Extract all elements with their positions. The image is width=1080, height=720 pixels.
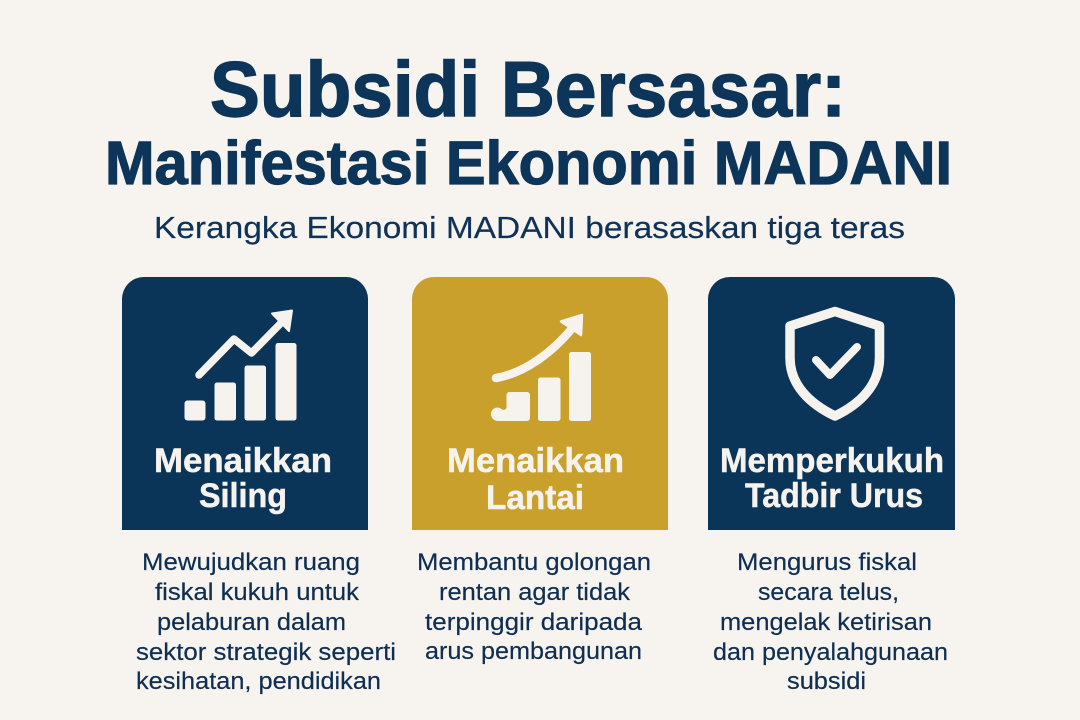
text block: Menaikkan Siling description: sektor strategik seperti — [136, 639, 396, 666]
text block: Menaikkan Lantai description: rentan agar tidak — [439, 579, 631, 606]
card background navy — [122, 277, 368, 530]
text block: Menaikkan Lantai description: arus pembangunan — [425, 638, 642, 665]
text block: Menaikkan Lantai description — [417, 549, 651, 665]
card background navy — [708, 277, 955, 530]
text block: Memperkukuh Tadbir Urus description: dan penyalahgunaan — [713, 639, 948, 666]
card heading — [447, 442, 624, 517]
text block: Memperkukuh Tadbir Urus description: mengelak ketirisan — [720, 609, 932, 636]
icon: rising bars with curved arrow — [491, 315, 591, 421]
icon: rising bar chart with arrow — [184, 310, 296, 420]
text block: Memperkukuh Tadbir Urus description: secara telus, — [758, 579, 899, 606]
panel: Menaikkan Siling — [122, 277, 368, 530]
card heading: Menaikkan — [447, 442, 624, 480]
icon: shield with check mark — [790, 312, 880, 416]
text block: Menaikkan Siling description: kesihatan, pendidikan — [136, 668, 381, 695]
text block: Menaikkan Lantai description: terpinggir daripada — [425, 609, 643, 636]
text block: Menaikkan Siling description: fiskal kukuh untuk — [155, 579, 360, 606]
card heading: Siling — [199, 477, 287, 515]
card heading: Menaikkan — [154, 442, 332, 480]
text block: Memperkukuh Tadbir Urus description — [713, 549, 948, 695]
card heading: Memperkukuh — [720, 442, 944, 480]
panel: Menaikkan Lantai — [412, 277, 668, 530]
title line 2: Manifestasi Ekonomi MADANI — [105, 129, 952, 197]
text block: Menaikkan Siling description: pelaburan dalam — [157, 609, 346, 636]
card heading — [720, 442, 944, 515]
panel: Memperkukuh Tadbir Urus — [708, 277, 955, 530]
text block: Menaikkan Siling description — [136, 549, 396, 695]
subtitle: Kerangka Ekonomi MADANI berasaskan tiga teras — [154, 210, 905, 245]
card heading: Tadbir Urus — [745, 477, 923, 515]
text block: Menaikkan Lantai description: Membantu golongan — [417, 549, 651, 576]
text block: Memperkukuh Tadbir Urus description: subsidi — [787, 668, 866, 695]
text block: Menaikkan Siling description: Mewujudkan ruang — [142, 549, 360, 576]
card heading: Lantai — [486, 479, 584, 517]
title line 1: Subsidi Bersasar: — [210, 45, 846, 133]
card background gold — [412, 277, 668, 530]
card heading — [154, 442, 332, 515]
text block: Memperkukuh Tadbir Urus description: Mengurus fiskal — [737, 549, 917, 576]
